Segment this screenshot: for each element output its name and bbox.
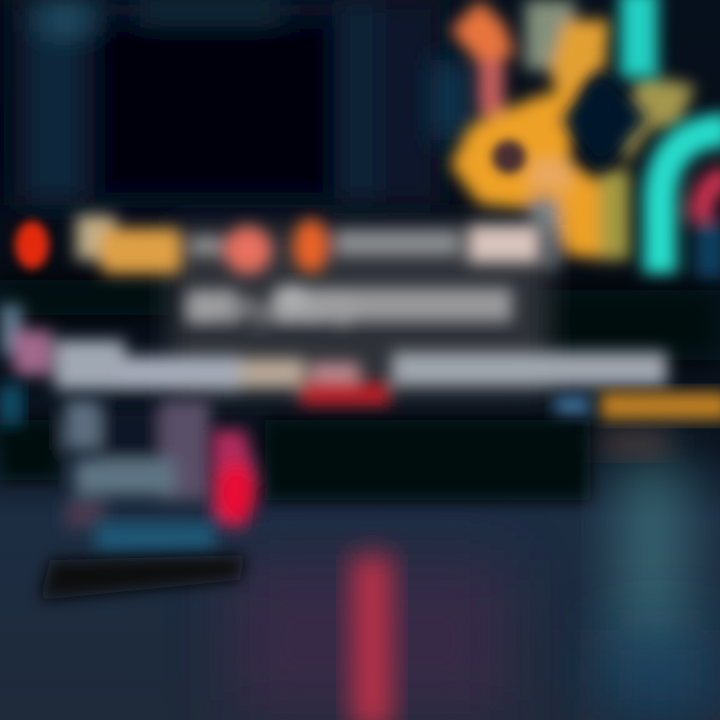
headline bbox=[0, 215, 667, 406]
left edge blue bbox=[0, 385, 22, 425]
object dark base bbox=[40, 555, 245, 600]
blue glow left of hex bbox=[430, 60, 470, 140]
orange hexagon pattern bbox=[450, 0, 695, 270]
icon: red dot bbox=[15, 221, 49, 269]
floor glow: red streak bbox=[352, 555, 392, 720]
object blue band bbox=[95, 522, 215, 552]
olive right bbox=[600, 170, 630, 260]
teal arc bbox=[660, 130, 720, 275]
top-left orange hex bbox=[450, 0, 515, 65]
red arc bbox=[700, 178, 720, 220]
grey under bbox=[530, 200, 558, 270]
brown hex centre bbox=[492, 140, 526, 174]
dark window panels bbox=[0, 0, 440, 205]
dark diamond bbox=[562, 70, 648, 170]
grey-green hex bbox=[525, 0, 575, 70]
upper arm bbox=[550, 20, 610, 110]
object body bbox=[0, 400, 210, 528]
blue patch under headline bbox=[555, 395, 590, 419]
floor glow: teal bbox=[625, 460, 680, 670]
headline line 2 bbox=[188, 284, 512, 322]
pink stem bbox=[478, 60, 504, 115]
floor glow: peach bbox=[600, 432, 670, 454]
orange strip bbox=[600, 392, 720, 420]
dark headline band bbox=[0, 280, 720, 360]
floor glow: purple bbox=[230, 560, 510, 720]
headline line 1 bbox=[76, 215, 540, 274]
small object bbox=[0, 400, 258, 600]
teal bar bbox=[620, 0, 658, 78]
olive hex right bbox=[615, 75, 695, 165]
headline line 2 text: in Mystery bbox=[186, 290, 354, 328]
main lattice bbox=[450, 90, 612, 260]
red underglow bbox=[300, 382, 390, 406]
right blue bbox=[695, 220, 720, 280]
red cone bbox=[212, 430, 258, 528]
soft peach bbox=[530, 160, 570, 190]
floor glow: blue right bbox=[600, 630, 720, 720]
dark block bbox=[265, 420, 590, 500]
teal shapes bbox=[620, 0, 720, 280]
headline line 3 bbox=[0, 305, 667, 406]
headline backdrop glow bbox=[170, 225, 550, 395]
